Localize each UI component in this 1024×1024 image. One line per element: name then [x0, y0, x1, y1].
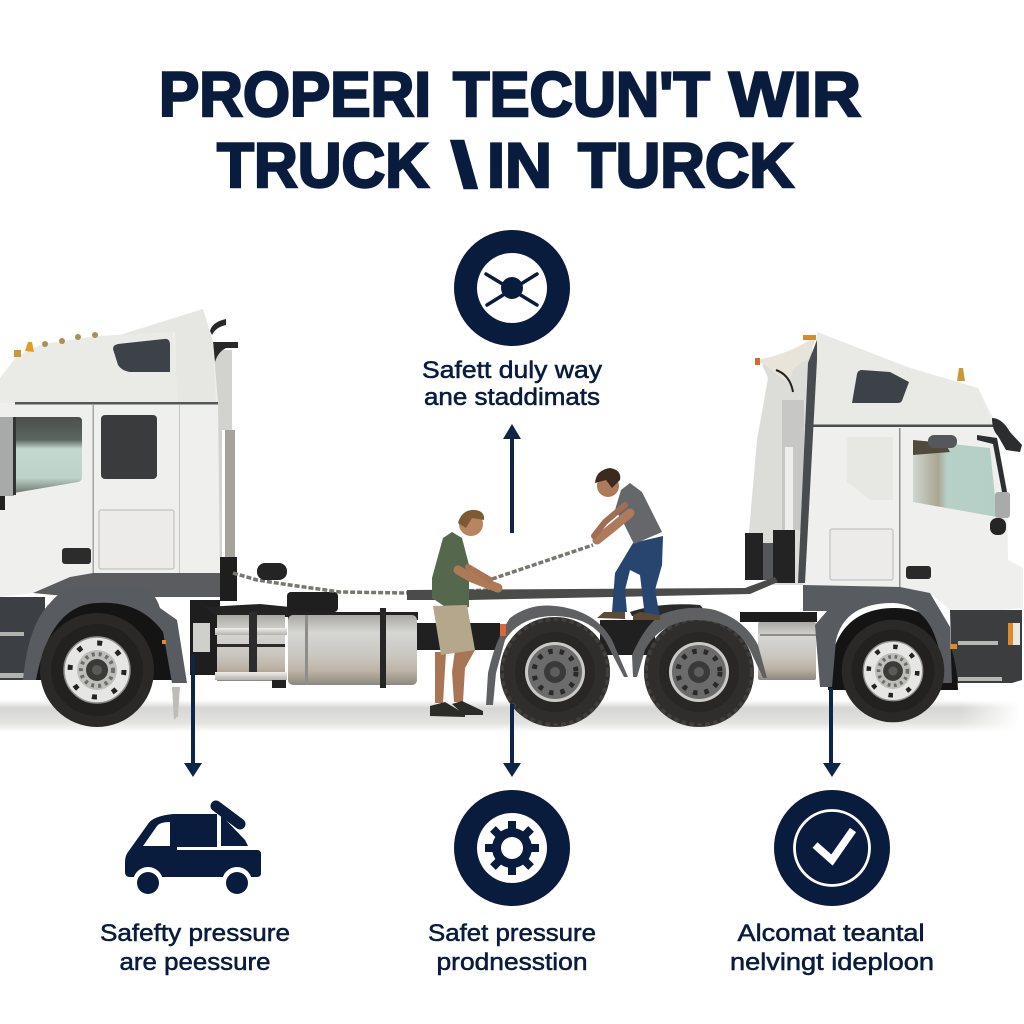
arrow down center [503, 704, 521, 777]
chain [233, 545, 593, 593]
top caption: Safett duly way [422, 357, 602, 384]
title: IN [487, 131, 552, 201]
caption right [730, 920, 934, 976]
arms [458, 570, 498, 588]
ground shadow [0, 700, 1024, 732]
top caption: ane staddimats [424, 384, 600, 411]
arrow down left [184, 655, 202, 777]
right truck cab body [803, 332, 1023, 610]
head [597, 475, 619, 497]
title: TRUCK [217, 131, 429, 201]
right truck post [798, 340, 817, 583]
rear tank [740, 612, 817, 622]
shoes [597, 612, 660, 620]
right truck brackets [745, 530, 795, 583]
left truck rear window [101, 415, 157, 479]
left truck bumper [0, 597, 45, 680]
icon: check [774, 790, 890, 906]
person left [430, 510, 498, 717]
title [159, 60, 861, 201]
right truck door handle [906, 566, 931, 579]
arms [597, 513, 630, 540]
rear fender one [486, 606, 628, 705]
caption left: are peessure [120, 949, 270, 976]
pad on tank [287, 592, 338, 612]
shoes [430, 702, 465, 717]
caption left [100, 920, 290, 976]
left truck mudflap [172, 687, 180, 720]
hitch bracket [220, 557, 237, 601]
top icon: wheel [454, 230, 570, 346]
caption right: nelvingt ideploon [730, 949, 934, 976]
caption center: Safet pressure [428, 920, 596, 947]
caption center: prodnesstion [436, 949, 588, 976]
left truck cab body [0, 309, 220, 597]
small tank [217, 615, 285, 681]
caption center [428, 920, 596, 976]
chassis [190, 557, 817, 688]
caption right: Alcomat teantal [738, 920, 924, 947]
left truck door panel [99, 510, 174, 569]
left truck door window [14, 417, 82, 493]
person right [594, 468, 663, 620]
right truck roof window [852, 370, 909, 403]
title: WIR [729, 60, 861, 130]
left truck roof window [113, 339, 170, 372]
left truck fender [23, 587, 187, 683]
arrow down right [823, 688, 841, 777]
right truck ribbed panel [782, 400, 804, 530]
left truck rear fairing [212, 350, 232, 560]
rear fender two [632, 608, 767, 678]
title: \ [451, 131, 477, 201]
frame rail [417, 620, 655, 655]
title: TECUN'T [453, 60, 710, 130]
right truck front wheel [842, 620, 944, 722]
title: PROPERI [159, 60, 431, 130]
top caption [422, 357, 602, 411]
icon: gear [454, 790, 570, 906]
right truck side panel [847, 437, 893, 500]
title: TURCK [578, 131, 794, 201]
shorts [433, 605, 475, 655]
left truck tail lights [210, 319, 238, 362]
right truck door window [913, 440, 997, 517]
left truck wheel arch [30, 600, 180, 680]
right truck fender [803, 585, 952, 687]
right truck spoiler [757, 340, 815, 385]
left truck front wheel [40, 613, 154, 727]
jeans [612, 536, 663, 617]
right truck [745, 332, 1023, 722]
left truck door handle [62, 548, 91, 564]
shirt [432, 532, 469, 610]
right truck markers [957, 368, 965, 381]
arrow up [503, 424, 521, 533]
tow bar [407, 577, 778, 600]
air horn [257, 563, 287, 580]
icon: van [125, 806, 261, 897]
left truck roof markers [14, 350, 21, 357]
right truck mirrors [928, 418, 1022, 535]
legs [435, 652, 446, 703]
caption left: Safefty pressure [100, 920, 290, 947]
left truck mirror [0, 417, 14, 496]
fuel tank [288, 615, 417, 685]
right truck rear wall [748, 345, 812, 585]
left truck grey band [33, 573, 220, 597]
head [459, 512, 483, 536]
right truck bumper [950, 610, 1022, 683]
right truck wheel arch [828, 608, 958, 690]
shirt [615, 483, 662, 544]
rear wheels [486, 604, 767, 727]
left truck [0, 309, 238, 727]
